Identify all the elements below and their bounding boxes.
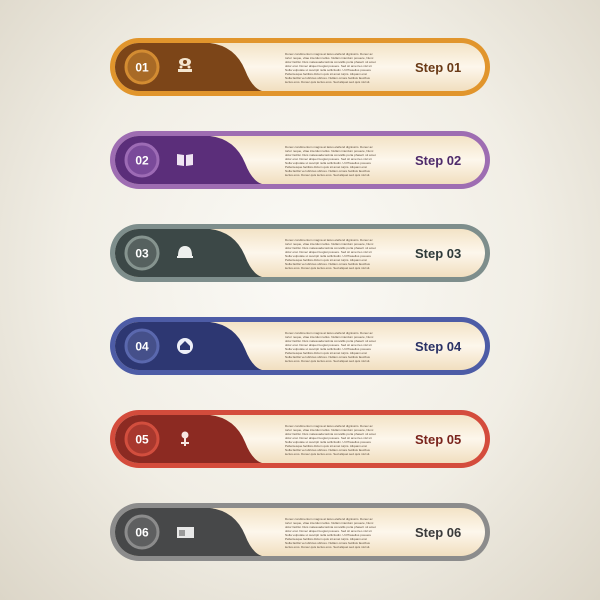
icon 01 <box>178 58 192 72</box>
number badge 06: 06 <box>135 526 149 540</box>
number badge 05 <box>126 423 158 455</box>
number badge 01 <box>126 51 158 83</box>
icon 04 <box>177 338 193 354</box>
number badge 03: 03 <box>135 246 149 260</box>
text block 03 <box>285 238 376 270</box>
number badge 02 <box>126 144 158 176</box>
number badge 01: 01 <box>135 60 149 74</box>
text block 01 <box>285 52 376 84</box>
text block 02 <box>285 145 376 177</box>
step 06 <box>110 503 490 561</box>
number badge 04 <box>126 330 158 362</box>
dark panel 02 <box>115 136 262 184</box>
dark panel 04 <box>115 322 262 370</box>
icon 05 <box>181 432 189 446</box>
dark panel 06 <box>115 508 262 556</box>
step 01 <box>110 38 490 96</box>
number badge 04: 04 <box>135 340 149 354</box>
step 02 <box>110 131 490 189</box>
text block 04 <box>285 331 376 363</box>
dark panel 01 <box>115 43 262 91</box>
icon 06 <box>177 527 194 538</box>
label 04: Step 04 <box>415 339 462 354</box>
text block 06 <box>285 517 376 549</box>
dark panel 05 <box>115 415 262 463</box>
icon 03 <box>177 246 193 258</box>
icon 02 <box>177 154 193 166</box>
label 06: Step 06 <box>415 525 461 540</box>
number badge 06 <box>126 516 158 548</box>
label 02: Step 02 <box>415 153 461 168</box>
label 05: Step 05 <box>415 432 461 447</box>
number badge 03 <box>126 237 158 269</box>
number badge 02: 02 <box>135 154 149 168</box>
text block 05 <box>285 424 376 456</box>
label 03: Step 03 <box>415 246 461 261</box>
number badge 05: 05 <box>135 432 149 446</box>
step 04 <box>110 317 490 375</box>
step 03 <box>110 224 490 282</box>
dark panel 03 <box>115 229 262 277</box>
label 01: Step 01 <box>415 60 461 75</box>
step 05 <box>110 410 490 468</box>
